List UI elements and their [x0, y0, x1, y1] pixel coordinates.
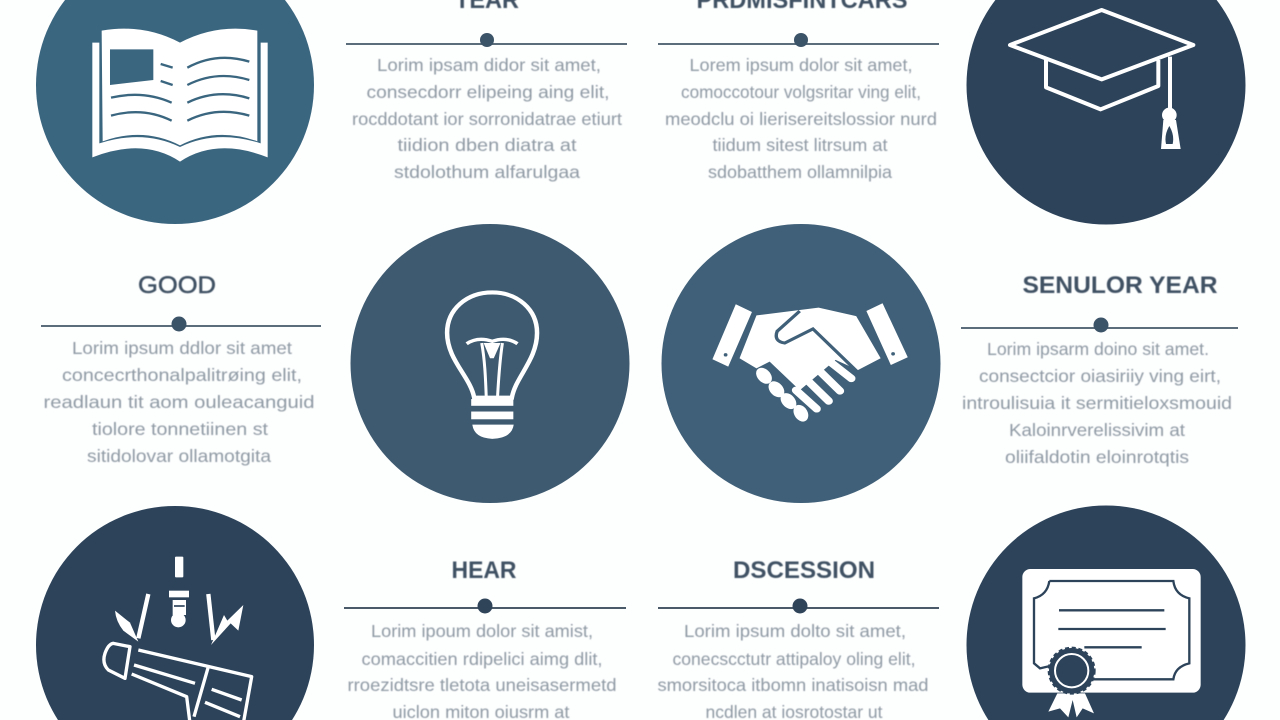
panel: book circle: [36, 0, 314, 224]
panel: top centre-left text: [346, 0, 627, 182]
panel: top centre-right text: [658, 0, 939, 182]
body text: Lorim ipoum dolor sit amist,: [371, 621, 593, 641]
divider with dot: [961, 318, 1238, 332]
body text: Lorem ipsum dolor sit amet,: [690, 55, 912, 75]
body text: consectcior oiasiriiy ving eirt,: [979, 366, 1221, 386]
body text: Lorim ipsum ddlor sit amet: [72, 338, 292, 358]
body text: [348, 621, 616, 720]
body text: Kaloinrverelissivim at: [1009, 420, 1185, 440]
body text: tiolore tonnetiinen st: [92, 419, 268, 439]
body text: tiidum sitest litrsum at: [712, 135, 888, 155]
body text: [658, 621, 928, 720]
body text: rocddotant ior sorronidatrae etiurt: [352, 109, 622, 129]
heading: discussion: DSCESSION: [733, 557, 875, 584]
divider with dot: [344, 598, 626, 614]
icon: certificate: [1022, 569, 1201, 717]
panel: hear text: [344, 557, 626, 720]
divider with dot: [658, 598, 939, 614]
body text: stdolothum alfarulgaa: [394, 162, 580, 182]
divider with dot: [41, 316, 321, 332]
heading: senior year: SENULOR YEAR: [1022, 272, 1218, 299]
divider with dot: [658, 33, 939, 47]
panel: graduation cap circle: [966, 0, 1246, 224]
body text: Lorim ipsum dolto sit amet,: [684, 621, 906, 641]
icon: light bulb: [447, 292, 537, 439]
body text: comaccitien rdipelici aimg dlit,: [362, 649, 602, 669]
panel: senior year text: [961, 272, 1238, 467]
icon: graduation cap: [1010, 10, 1193, 149]
body text: [44, 338, 314, 466]
panel: certificate circle: [966, 506, 1246, 720]
body text: meodclu oi lierisereitslossior nurd: [665, 109, 937, 129]
heading: hear: HEAR: [452, 557, 516, 584]
body text: Lorim ipsam didor sit amet,: [377, 55, 601, 75]
divider with dot: [346, 33, 627, 47]
body text: oliifaldotin eloinrotqtis: [1005, 447, 1189, 467]
body text: conecscctutr attipaloy oling elit,: [672, 649, 916, 669]
panel: handshake circle: [662, 224, 940, 503]
body text: [665, 55, 937, 182]
panel: light bulb circle: [350, 224, 630, 503]
body text: [352, 55, 622, 182]
body text: sitidolovar ollamotgita: [87, 446, 271, 466]
body text: smorsitoca itbomn inatisoisn mad: [658, 675, 928, 695]
body text: Lorim ipsarm doino sit amet.: [987, 339, 1209, 359]
heading: good: GOOD: [138, 272, 216, 299]
body text: consecdorr elipeing aing elit,: [366, 82, 610, 102]
body text: readlaun tit aom ouleacanguid: [44, 392, 314, 412]
body text: comoccotour volgsritar ving elit,: [681, 82, 921, 102]
body text: rroezidtsre tletota uneisasermetd: [348, 675, 616, 695]
body text: introulisuia it sermitieloxsmouid: [962, 393, 1232, 413]
panel: discussion text: [658, 557, 939, 720]
panel: diploma scroll circle: [36, 506, 314, 720]
body text: sdobatthem ollamnilpia: [708, 162, 892, 182]
icon: handshake: [712, 303, 908, 424]
body text: tiidion dben diatra at: [398, 135, 577, 155]
icon: diploma scroll with sparks: [104, 557, 252, 720]
icon: open book: [92, 29, 268, 162]
body text: [962, 339, 1232, 467]
body text: concecrthonalpalitrøing elit,: [62, 365, 302, 385]
panel: good text: [41, 272, 321, 466]
